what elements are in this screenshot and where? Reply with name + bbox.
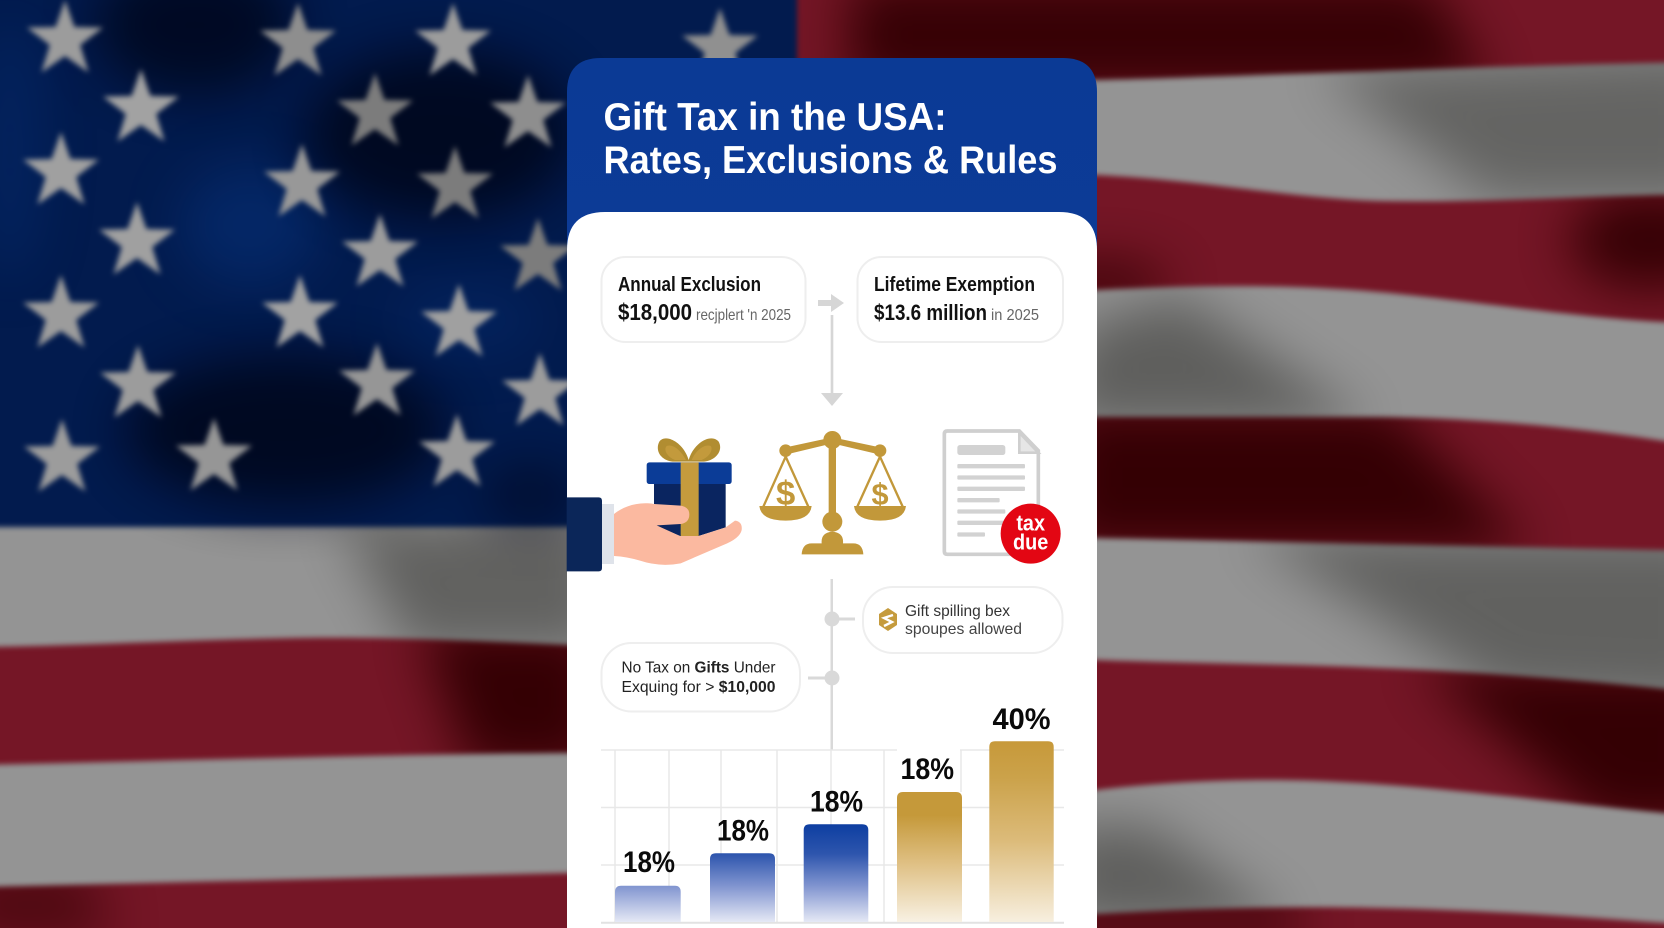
bar 2	[710, 814, 775, 922]
bar 3: 18%	[810, 786, 863, 818]
arrow: down to icons	[821, 315, 843, 406]
icon: hand holding gift	[567, 438, 742, 571]
callout: gift splitting: spoupes allowed	[905, 621, 1022, 638]
panel: white body	[567, 212, 1097, 928]
bar 5	[989, 703, 1054, 922]
card: lifetime exemption	[858, 257, 1063, 342]
bar 2: 18%	[717, 814, 769, 848]
timeline connector	[808, 579, 855, 750]
card: annual exclusion: Annual Exclusion	[618, 274, 761, 296]
card: lifetime exemption: $13.6 million	[874, 300, 987, 325]
badge: tax due	[1001, 504, 1061, 564]
bar 3	[804, 786, 868, 922]
card: annual exclusion	[602, 257, 806, 342]
callout: gift splitting: Gift spilling bex	[905, 603, 1010, 620]
card: lifetime exemption: Lifetime Exemption	[874, 274, 1035, 296]
icon: gold coin symbol	[879, 608, 897, 631]
bar 1	[615, 846, 681, 922]
badge: tax due: tax	[1016, 511, 1046, 536]
icon: balance scale with dollar signs: $	[776, 475, 795, 513]
bar 4	[897, 753, 962, 922]
bar 4: 18%	[900, 753, 954, 786]
card: annual exclusion: recjplert 'n 2025	[696, 307, 791, 324]
badge: tax due: due	[1013, 529, 1048, 554]
icon: tax document with badge	[944, 431, 1061, 564]
callout: no tax on gifts: Exquing for > $10,000	[622, 679, 776, 696]
arrow: right between cards	[818, 294, 844, 312]
card: annual exclusion: $18,000	[618, 299, 692, 325]
panel: infographic card	[567, 58, 1097, 928]
callout: gift splitting	[863, 587, 1062, 653]
flag canton: dark blue field	[0, 0, 797, 527]
panel: blue header	[567, 58, 1097, 928]
bar 5: 40%	[992, 703, 1050, 736]
bar chart: gift tax rates	[601, 703, 1064, 923]
callout: no tax on gifts: No Tax on Gifts Under	[622, 660, 776, 676]
title	[604, 96, 1058, 182]
card: lifetime exemption: in 2025	[991, 307, 1039, 324]
title: Rates, Exclusions & Rules	[604, 139, 1058, 182]
canton stars	[23, 0, 758, 491]
title: Gift Tax in the USA:	[604, 96, 946, 139]
bar 1: 18%	[623, 846, 675, 879]
icon: balance scale with dollar signs: $	[871, 477, 889, 511]
icon: balance scale with dollar signs	[759, 431, 906, 554]
callout: no tax on gifts	[602, 643, 800, 712]
